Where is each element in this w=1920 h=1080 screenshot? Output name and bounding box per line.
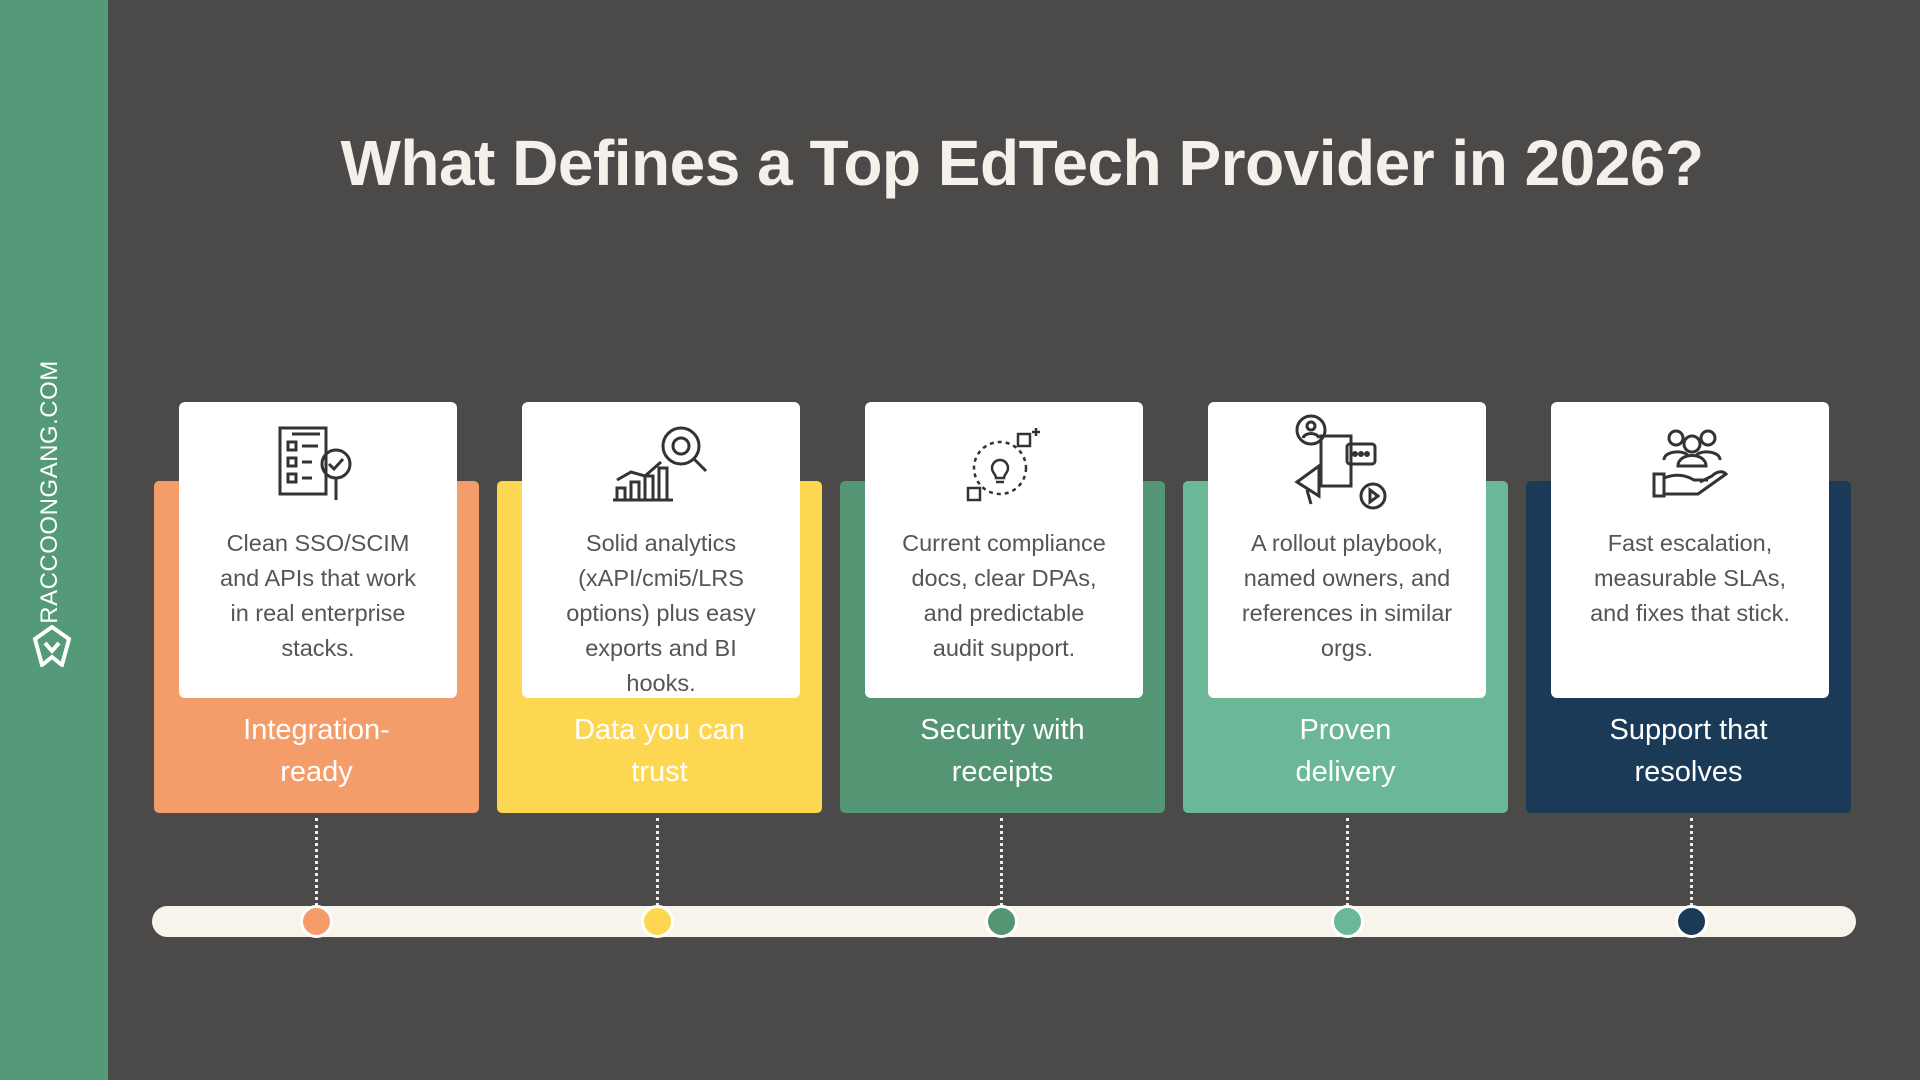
card: Fast escalation, bbox=[1608, 530, 1772, 556]
card bbox=[522, 402, 800, 698]
card bbox=[1551, 402, 1829, 698]
card bbox=[1208, 402, 1486, 698]
panel: support that resolves: Support that bbox=[1610, 714, 1768, 746]
panel: data you can trust: Data you can bbox=[574, 714, 745, 746]
panel: integration-ready bbox=[154, 402, 479, 813]
panel: proven delivery: Proven bbox=[1300, 714, 1391, 746]
card: docs, clear DPAs, bbox=[911, 565, 1097, 591]
card: and fixes that stick. bbox=[1590, 600, 1790, 626]
card: orgs. bbox=[1321, 635, 1373, 661]
card: Solid analytics bbox=[586, 530, 736, 556]
panel: proven delivery: delivery bbox=[1296, 756, 1395, 788]
panel: data you can trust bbox=[497, 402, 822, 813]
panel: data you can trust: trust bbox=[631, 756, 688, 788]
card: named owners, and bbox=[1244, 565, 1450, 591]
card: and APIs that work bbox=[220, 565, 416, 591]
panel: security with receipts bbox=[840, 402, 1165, 813]
card: A rollout playbook, bbox=[1251, 530, 1443, 556]
panel: support that resolves: resolves bbox=[1634, 756, 1742, 788]
card: references in similar bbox=[1242, 600, 1452, 626]
card: measurable SLAs, bbox=[1594, 565, 1786, 591]
title: What Defines a Top EdTech Provider in 2026? bbox=[340, 127, 1704, 199]
panel: support that resolves bbox=[1526, 402, 1851, 813]
panel: integration-ready: Integration- bbox=[243, 714, 390, 746]
card bbox=[865, 402, 1143, 698]
card: (xAPI/cmi5/LRS bbox=[578, 565, 744, 591]
icon: logo bbox=[32, 625, 72, 667]
card: hooks. bbox=[626, 670, 696, 696]
timeline bbox=[152, 818, 1856, 938]
card: in real enterprise bbox=[230, 600, 406, 626]
card: and predictable bbox=[924, 600, 1084, 626]
panel: proven delivery bbox=[1183, 402, 1508, 813]
card: Current compliance bbox=[902, 530, 1106, 556]
panel: security with receipts: receipts bbox=[952, 756, 1053, 788]
card: options) plus easy bbox=[566, 600, 756, 626]
brand text: RACCOONGANG.COM bbox=[36, 360, 63, 624]
panel: security with receipts: Security with bbox=[920, 714, 1085, 746]
panel: integration-ready: ready bbox=[280, 756, 353, 788]
card: Clean SSO/SCIM bbox=[227, 530, 409, 556]
card: exports and BI bbox=[585, 635, 737, 661]
card: audit support. bbox=[933, 635, 1075, 661]
card bbox=[179, 402, 457, 698]
sidebar bbox=[0, 0, 108, 1080]
card: stacks. bbox=[281, 635, 355, 661]
